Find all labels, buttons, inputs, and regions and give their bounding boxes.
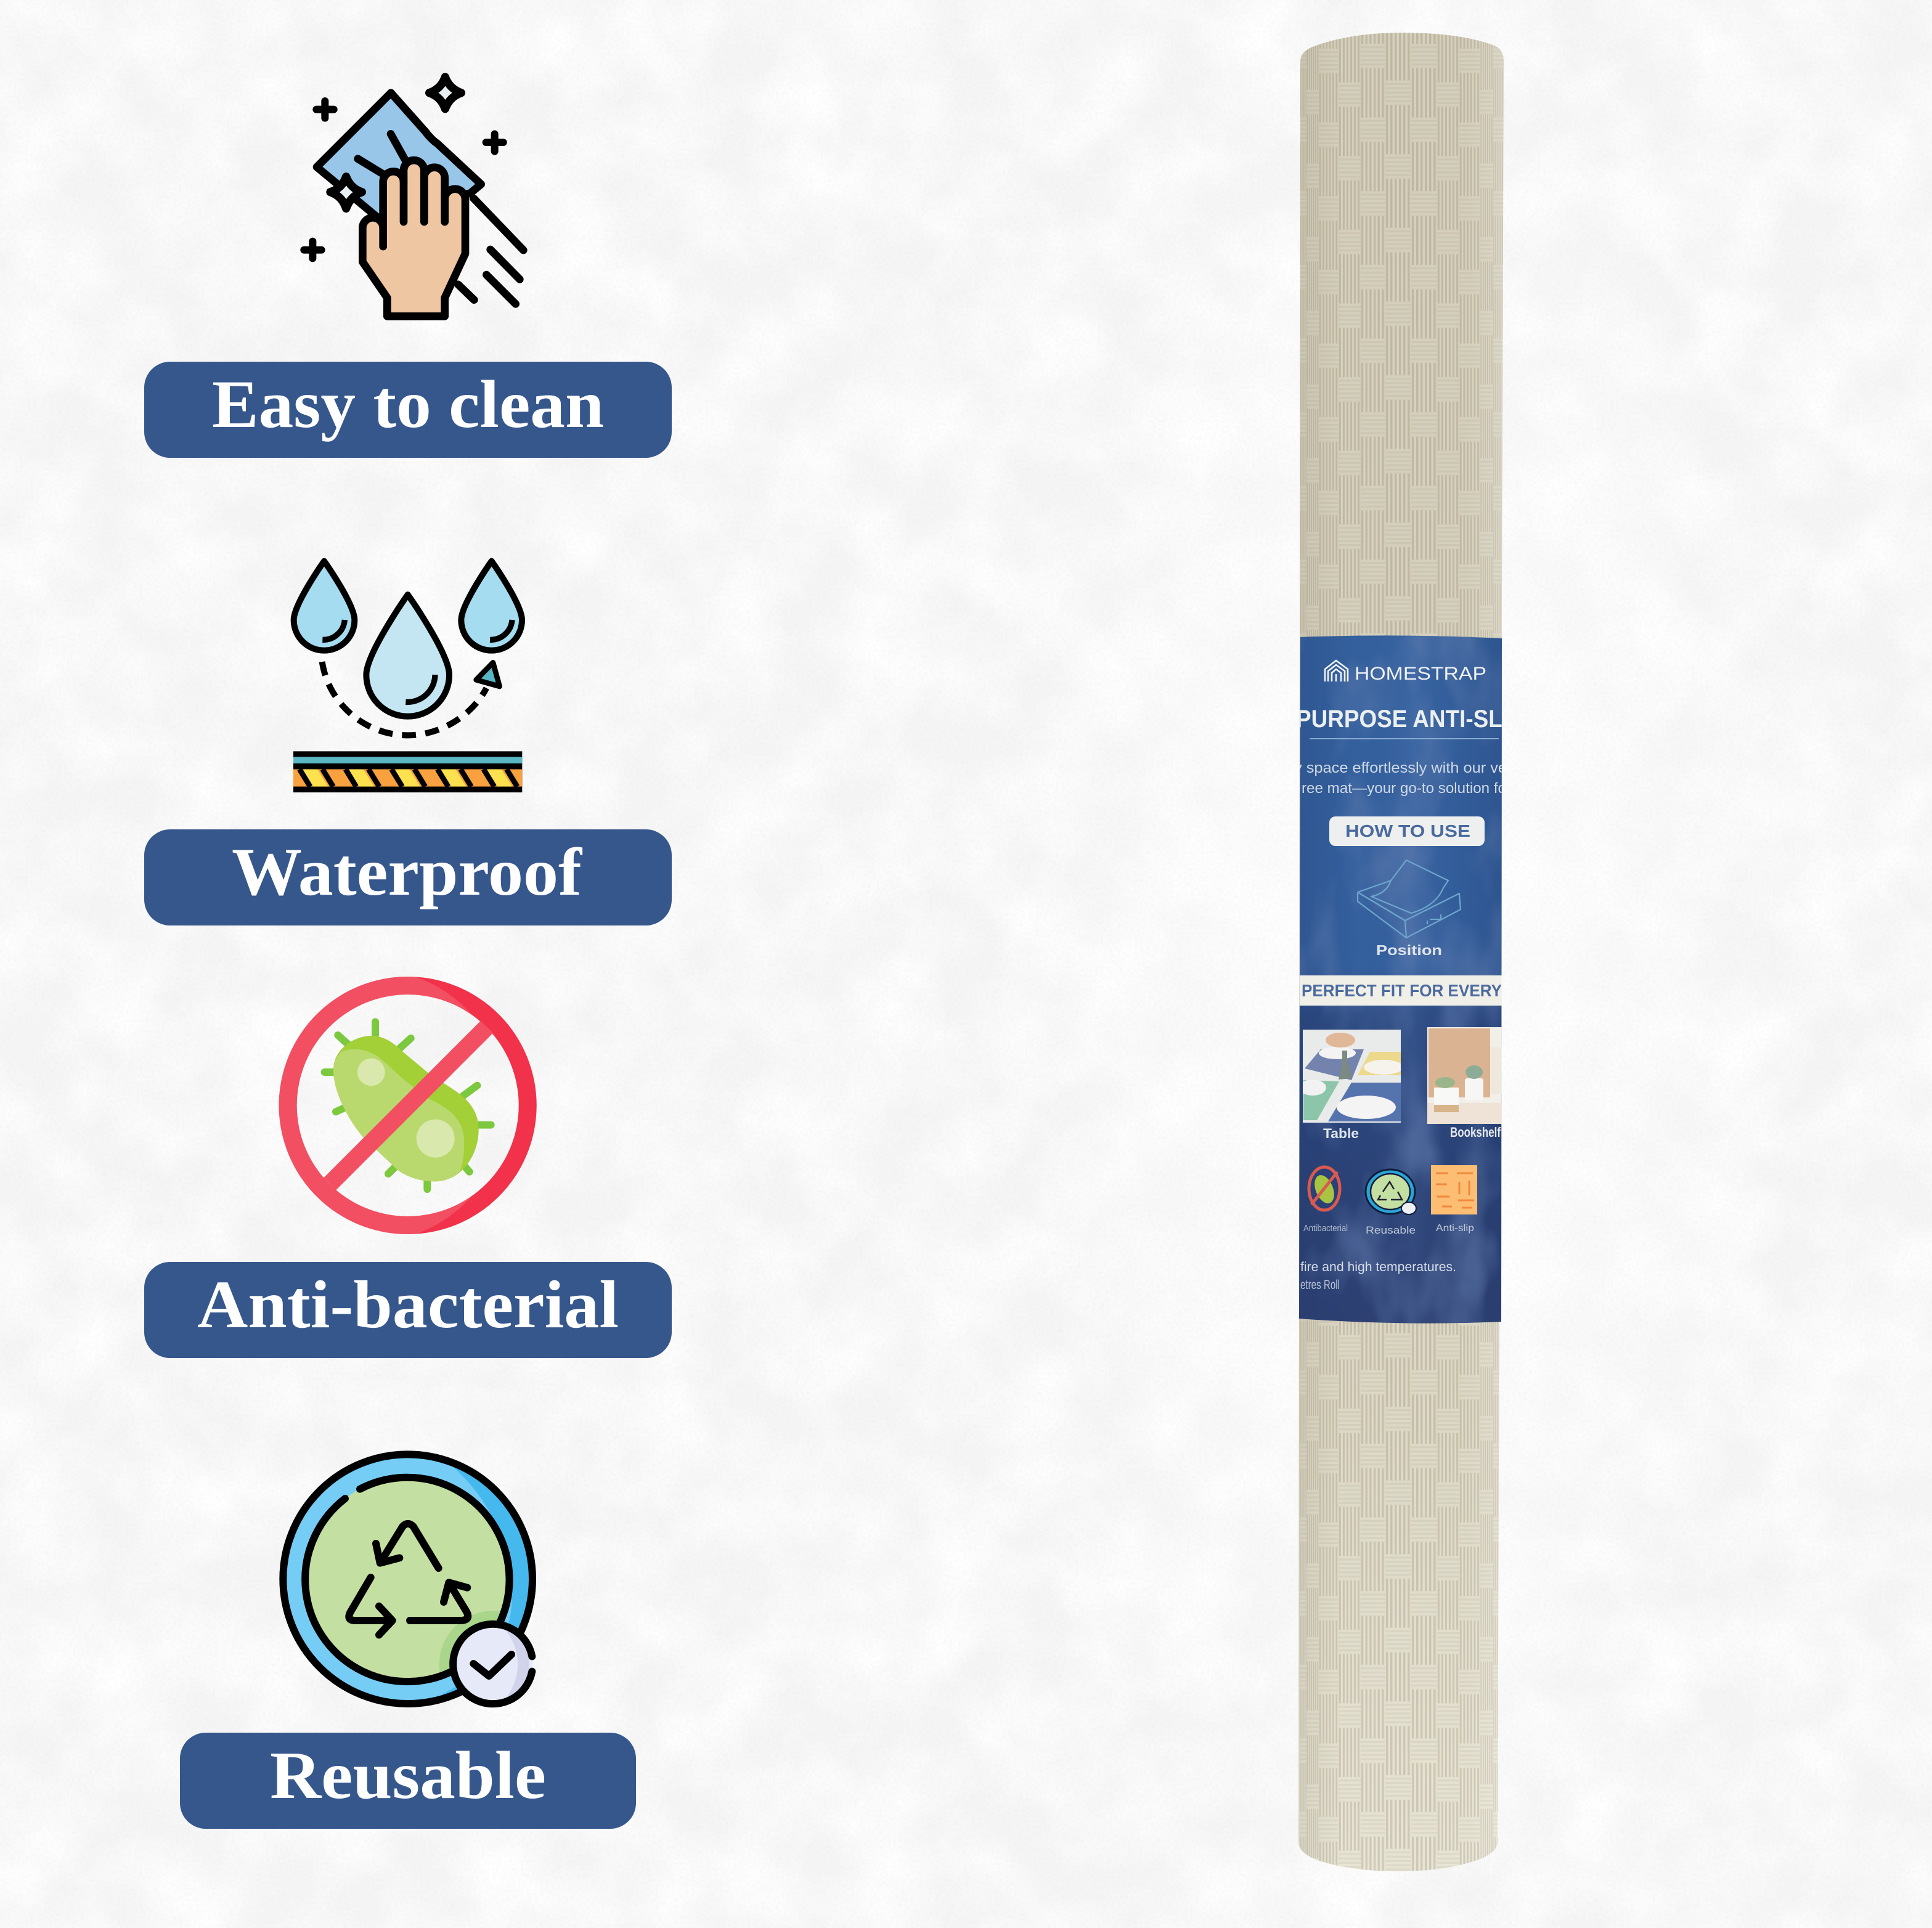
brand logo: HOMESTRAP <box>1325 661 1486 684</box>
brand logo: HOMESTRAP: HOMESTRAP <box>1355 664 1486 684</box>
small icon: reusable <box>1366 1169 1416 1214</box>
label footer text: fire and high temperatures. <box>1300 1260 1456 1274</box>
button: HOW TO USE <box>1329 816 1485 846</box>
caption: Antibacterial: Antibacterial <box>1303 1223 1348 1234</box>
icon: crossed-out bacterium <box>279 977 537 1234</box>
label intro text <box>1294 738 1507 797</box>
small icon: antibacterial <box>1309 1167 1340 1210</box>
caption: Anti-slip: Anti-slip <box>1436 1223 1474 1234</box>
caption: Position: Position <box>1376 942 1442 958</box>
icon: recycle symbol with check badge <box>283 1454 547 1719</box>
label pill: Waterproof: Waterproof <box>232 834 582 909</box>
label pill: Easy to clean: Easy to clean <box>212 367 604 442</box>
label footer text <box>1300 1260 1456 1292</box>
label pill: Anti-bacterial <box>144 1262 672 1358</box>
label pill: Anti-bacterial: Anti-bacterial <box>197 1267 619 1342</box>
white banner: PERFECT FIT FOR EVERY <box>1294 975 1510 1006</box>
label heading: PURPOSE ANTI-SLI <box>1296 706 1509 733</box>
photo: table with placemats <box>1299 1030 1403 1123</box>
label pill: Reusable <box>180 1733 636 1829</box>
caption: Table: Table <box>1323 1126 1359 1141</box>
icon: water drops repelled from waterproof layer <box>293 561 522 792</box>
small icon: anti-slip swatch <box>1431 1165 1477 1214</box>
label pill: Waterproof <box>144 829 672 925</box>
white banner: PERFECT FIT FOR EVERY: PERFECT FIT FOR EVERY <box>1302 981 1502 1000</box>
photo: bookshelf with plants <box>1427 1027 1502 1124</box>
caption: Bookshelf: Bookshelf <box>1450 1125 1501 1140</box>
icon: hand wiping with cloth <box>304 77 523 316</box>
label pill: Reusable: Reusable <box>270 1738 546 1813</box>
label pill: Easy to clean <box>144 362 672 458</box>
line drawing: mat in drawer <box>1358 860 1461 938</box>
caption: Reusable: Reusable <box>1366 1224 1416 1236</box>
label intro text: ree mat—your go-to solution fo <box>1302 780 1506 797</box>
label footer text: etres Roll <box>1300 1278 1340 1292</box>
product label wrapped around the roll <box>1294 632 1510 1328</box>
product: rolled anti-slip mat with woven texture <box>1294 0 1510 1928</box>
button: HOW TO USE: HOW TO USE <box>1345 821 1470 840</box>
label intro text: y space effortlessly with our ve <box>1294 760 1507 776</box>
